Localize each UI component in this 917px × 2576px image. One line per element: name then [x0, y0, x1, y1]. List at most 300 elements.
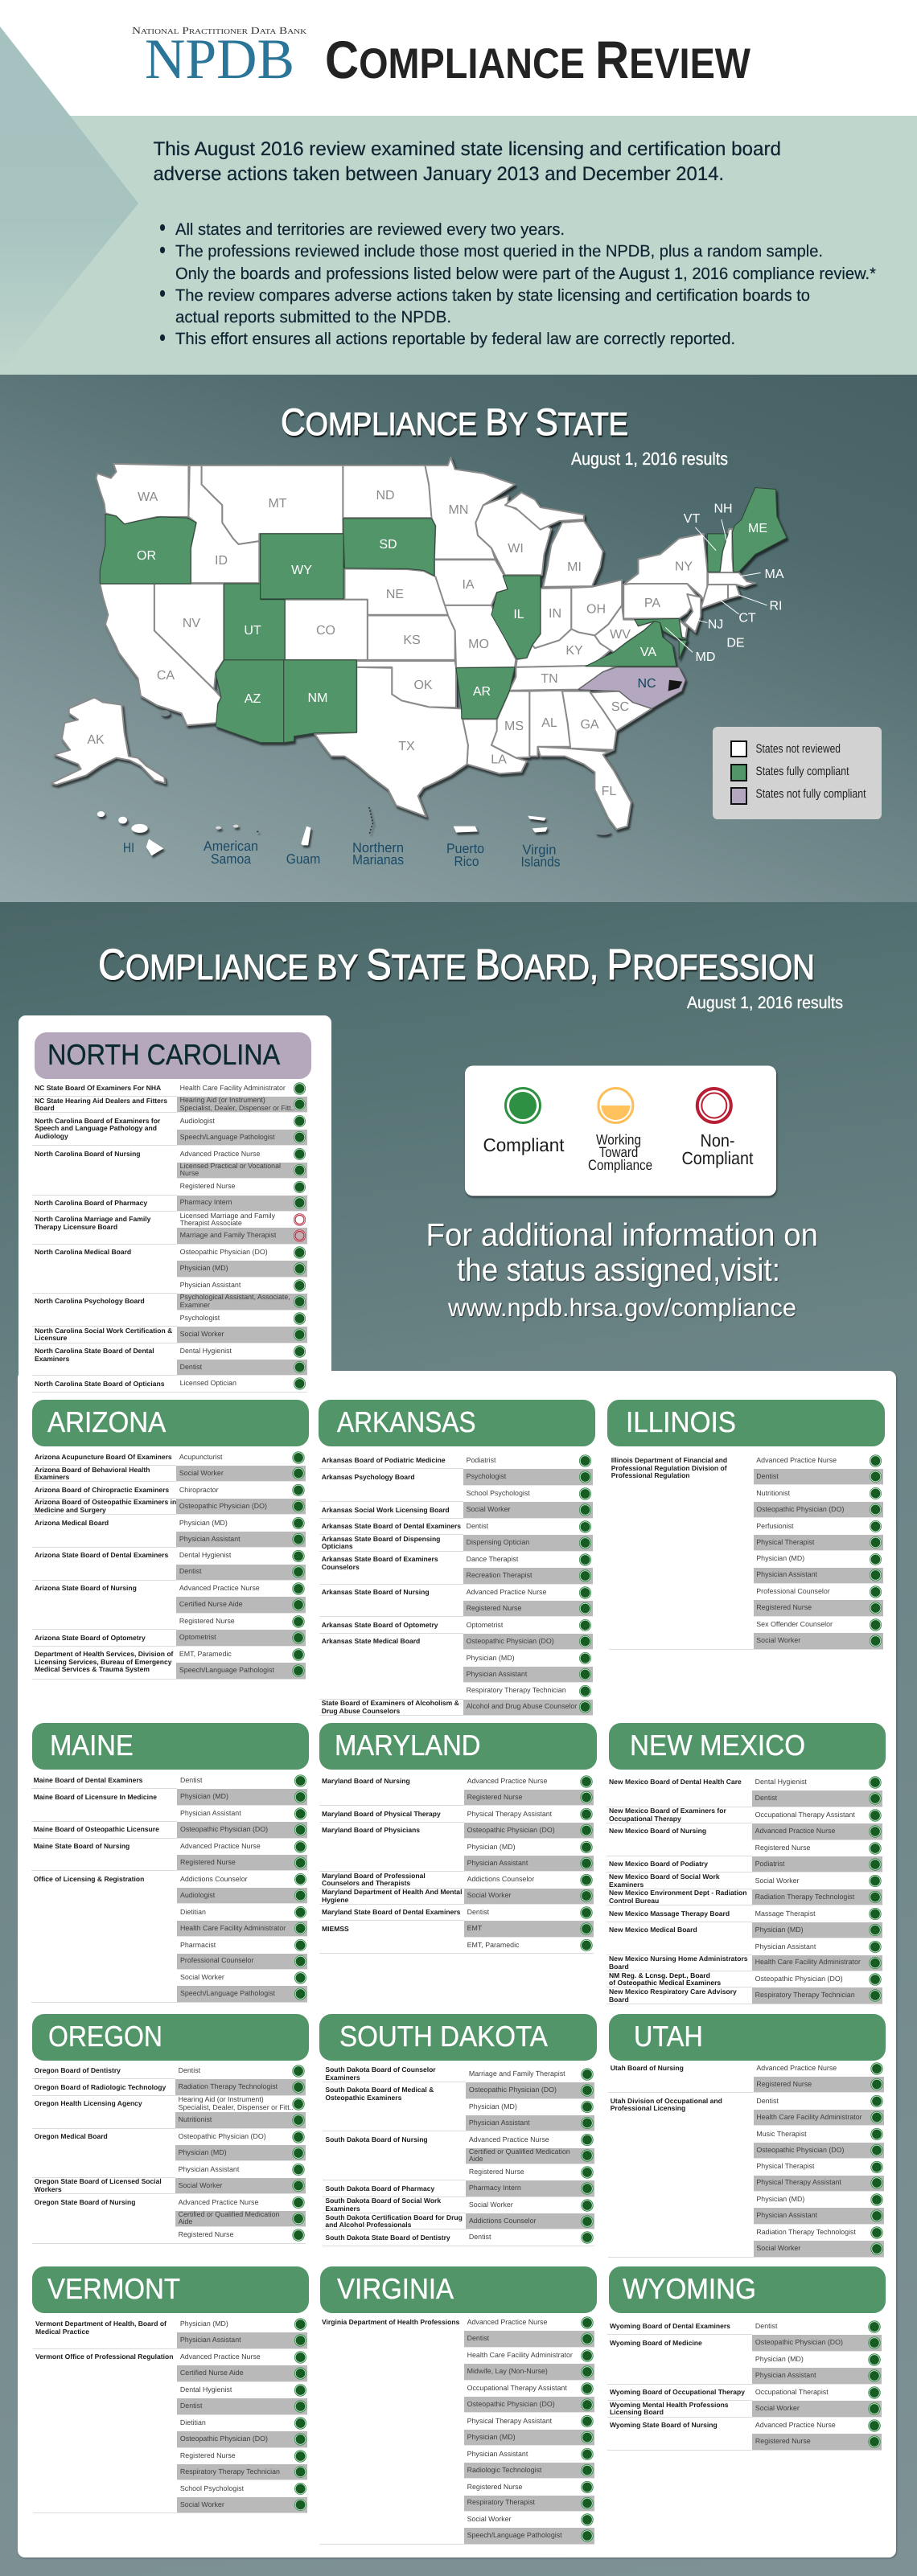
table: Vermont boards: Physician Assistant	[180, 2336, 241, 2344]
table: Illinois boards: Illinois Department of Financial and	[611, 1456, 727, 1464]
map: grey state labels: MT	[268, 497, 287, 511]
table: South Dakota boards: South Dakota Certification Board for Drug	[325, 2213, 463, 2221]
table: North Carolina boards: Audiologist	[180, 1117, 215, 1125]
map: grey state labels: ND	[376, 489, 395, 502]
table: Maine boards: Physician (MD)	[180, 1792, 228, 1800]
table: North Carolina boards: North Carolina Board of Examiners for	[35, 1117, 160, 1125]
table: Arkansas boards: Podiatrist	[467, 1456, 496, 1464]
table: Oregon boards: Social Worker	[179, 2181, 222, 2189]
table: Maryland boards: Maryland Board of Physical Therapy	[322, 1810, 441, 1818]
map legend: States not reviewed	[756, 742, 841, 756]
table: Illinois boards: Physician Assistant	[756, 1570, 817, 1578]
table: New Mexico boards: New Mexico Board of Examiners for	[609, 1807, 726, 1815]
table: Vermont boards: Certified Nurse Aide	[180, 2369, 244, 2377]
map: white state labels: AR	[473, 685, 491, 699]
map: grey state labels: WA	[138, 490, 158, 504]
table: Vermont boards: Registered Nurse	[180, 2451, 236, 2459]
legend labels: Compliance	[588, 1157, 652, 1173]
state: Maine	[31, 1723, 309, 2003]
map: grey state labels: IA	[462, 578, 475, 592]
heading: Arizona	[32, 1400, 309, 1446]
map: white state labels: NM	[308, 691, 327, 705]
table: New Mexico boards: Physician Assistant	[755, 1942, 816, 1950]
state: Vermont	[32, 2266, 309, 2513]
bullet list: The professions reviewed include those most queried in the NPDB, plus a random sample.	[175, 242, 823, 260]
heading: New Mexico: NEW MEXICO	[629, 1729, 805, 1762]
table: Maryland boards: Addictions Counselor	[467, 1875, 534, 1883]
additional information note: the status assigned,visit:	[457, 1253, 780, 1288]
table: South Dakota boards: Osteopathic Examiners	[325, 2094, 401, 2102]
territory labels: Marianas	[352, 852, 404, 868]
table: Vermont boards	[33, 2318, 307, 2513]
table: North Carolina boards: Examiners	[35, 1354, 69, 1362]
table: Oregon boards: Specialist, Dealer, Dispenser or Fitt..	[179, 2103, 294, 2111]
map: white state labels: CT	[738, 611, 756, 626]
map: white state labels: WY	[291, 564, 312, 577]
table: Arizona boards: Advanced Practice Nurse	[179, 1584, 260, 1592]
table: North Carolina boards: Psychologist	[180, 1314, 220, 1322]
table: North Carolina boards: North Carolina Board of Pharmacy	[35, 1199, 147, 1207]
map: white state labels: UT	[244, 624, 261, 638]
table: Virginia boards: Health Care Facility Administrator	[467, 2351, 573, 2359]
map: grey state labels: SC	[611, 700, 629, 714]
table: Wyoming boards: Wyoming Board of Occupational Therapy	[610, 2388, 745, 2396]
table: Oregon boards: Physician (MD)	[179, 2148, 227, 2156]
table: Oregon boards: Certified or Qualified Medication	[179, 2210, 279, 2218]
table: Virginia boards: Physician Assistant	[467, 2450, 528, 2458]
table: North Carolina boards: Specialist, Dealer, Dispenser or Fitt..	[180, 1104, 295, 1112]
table: Illinois boards: Dentist	[756, 1472, 779, 1480]
table: Utah boards: Physician (MD)	[756, 2195, 804, 2203]
table: Maine boards: Physician Assistant	[180, 1809, 241, 1817]
chevron arrow	[0, 27, 138, 374]
table: Arkansas boards: Arkansas State Board of Dispensing	[322, 1535, 440, 1543]
heading: Compliance By State: COMPLIANCE BY STATE	[281, 400, 628, 443]
table: North Carolina boards: Physician Assistant	[180, 1281, 241, 1289]
table: Maryland boards: Maryland Department of Health And Mental	[322, 1888, 462, 1896]
table: Vermont boards: Osteopathic Physician (DO)	[180, 2434, 268, 2443]
map: grey state labels: WV	[610, 628, 631, 642]
icon: non-compliant	[697, 1089, 731, 1122]
bullet list: actual reports submitted to the NPDB.	[175, 308, 451, 326]
table: Maine boards: Dentist	[180, 1776, 203, 1784]
map: grey state labels	[87, 489, 693, 798]
table: Virginia boards: Respiratory Therapist	[467, 2498, 535, 2506]
table: Arkansas boards: Arkansas State Board of Nursing	[322, 1588, 430, 1596]
table: North Carolina boards: Examiner	[180, 1301, 210, 1309]
table: South Dakota boards: Dentist	[469, 2233, 491, 2241]
heading: Maryland	[319, 1723, 597, 1770]
table: North Carolina boards: Nurse	[180, 1169, 199, 1177]
map: grey state labels: OK	[413, 679, 433, 692]
map: white state labels	[137, 502, 784, 706]
table: Virginia boards: Speech/Language Pathologist	[467, 2531, 562, 2539]
table: Maryland boards: Maryland Board of Nursing	[322, 1777, 410, 1785]
heading: South Dakota: SOUTH DAKOTA	[339, 2020, 548, 2053]
heading: South Dakota	[319, 2014, 597, 2061]
table: Illinois boards: Registered Nurse	[756, 1603, 812, 1611]
table: Arkansas boards: Dentist	[467, 1522, 488, 1530]
table: Maine boards: Registered Nurse	[180, 1858, 236, 1866]
table: North Carolina boards: North Carolina State Board of Opticians	[35, 1380, 164, 1388]
table: Virginia boards: Registered Nurse	[467, 2483, 522, 2491]
table: Arkansas boards: Arkansas Psychology Board	[322, 1473, 415, 1481]
map: white state labels: SD	[379, 538, 397, 552]
table: South Dakota boards: South Dakota Board of Medical &	[325, 2086, 434, 2094]
table: Oregon boards: Hearing Aid (or Instrument)	[179, 2095, 264, 2103]
table: Illinois boards: Physician (MD)	[756, 1554, 804, 1562]
table: New Mexico boards: Dental Hygienist	[755, 1778, 807, 1786]
table: North Carolina boards: Speech and Language Pathology and	[35, 1124, 157, 1132]
table: North Carolina boards: Therapist Associate	[180, 1219, 242, 1227]
table: Illinois boards: Physical Therapist	[756, 1538, 814, 1546]
table: Oregon boards: Oregon State Board of Nursing	[35, 2198, 135, 2206]
map: white state labels: IL	[513, 608, 524, 621]
subheading: map date: August 1, 2016 results	[571, 449, 728, 469]
table: North Carolina boards: Therapy Licensure Board	[35, 1223, 117, 1231]
table: Maine boards: Maine Board of Dental Examiners	[34, 1776, 142, 1784]
table: South Dakota boards: Physician (MD)	[469, 2102, 517, 2110]
table: Illinois boards: Social Worker	[756, 1636, 800, 1644]
map: grey state labels: IN	[549, 607, 561, 621]
map: white state labels: MA	[764, 568, 784, 581]
heading: Compliance by State Board, Profession: COMPLIANCE BY STATE BOARD, PROFESSION	[98, 941, 815, 989]
table: North Carolina boards: Osteopathic Physician (DO)	[180, 1248, 268, 1256]
heading: North Carolina: NORTH CAROLINA	[47, 1038, 280, 1071]
table: Utah boards: Registered Nurse	[756, 2080, 812, 2088]
table: North Carolina boards: Psychological Assistant, Associate,	[180, 1293, 290, 1301]
table: Arkansas boards: Drug Abuse Counselors	[322, 1707, 400, 1715]
map: grey state labels: MN	[449, 503, 468, 517]
heading: Maine: MAINE	[50, 1729, 134, 1762]
table: Virginia boards	[319, 2316, 594, 2545]
heading: Arkansas: ARKANSAS	[337, 1405, 476, 1438]
table: Arizona boards: Optometrist	[179, 1633, 216, 1641]
territory labels: Northern	[352, 840, 404, 855]
table: South Dakota boards: South Dakota State Board of Dentistry	[325, 2233, 450, 2242]
table: Arkansas boards: Physician Assistant	[467, 1670, 527, 1678]
table: Arizona boards: Medicine and Surgery	[35, 1506, 106, 1514]
table: Arizona boards: Licensing Services, Bureau of Emergency	[35, 1658, 172, 1666]
additional information note: For additional information on	[426, 1218, 818, 1253]
table: New Mexico boards: Occupational Therapy	[609, 1815, 681, 1823]
table: Utah boards: Music Therapist	[756, 2130, 807, 2138]
table: Wyoming boards: Wyoming State Board of Nursing	[610, 2421, 718, 2429]
table: North Carolina boards: Licensed Practical or Vocational	[180, 1162, 281, 1170]
table: Maryland boards: Advanced Practice Nurse	[467, 1777, 547, 1785]
heading: Arizona: ARIZONA	[47, 1405, 166, 1438]
legend labels: Working	[596, 1132, 641, 1148]
table: Arkansas boards: Respiratory Therapy Technician	[467, 1686, 566, 1694]
table: Arizona boards: Arizona Board of Osteopathic Examiners in	[35, 1498, 176, 1506]
heading: Utah: UTAH	[634, 2020, 703, 2053]
table: South Dakota boards: Aide	[469, 2155, 483, 2163]
table: Maryland boards: Maryland Board of Physicians	[322, 1826, 420, 1834]
table: New Mexico boards: Control Bureau	[609, 1897, 659, 1905]
map: grey state labels: NV	[183, 617, 200, 630]
heading: Oregon	[32, 2014, 309, 2061]
map: grey state labels: MI	[567, 560, 582, 574]
panel: North Carolina	[19, 1015, 331, 1401]
table: Maine boards: Health Care Facility Administrator	[180, 1924, 286, 1932]
map: grey state labels: CA	[157, 669, 175, 683]
state: Utah	[608, 2014, 886, 2258]
table: Illinois boards: Sex Offender Counselor	[756, 1620, 833, 1628]
table: Wyoming boards: Wyoming Mental Health Professions	[610, 2401, 729, 2409]
table: Maryland boards: EMT, Paramedic	[467, 1941, 519, 1949]
table: Maryland boards: Physician Assistant	[467, 1859, 528, 1867]
legend labels	[483, 1130, 753, 1173]
additional information note: www.npdb.hrsa.gov/compliance	[447, 1294, 796, 1322]
table: South Dakota boards: South Dakota Board of Counselor	[325, 2065, 436, 2074]
heading: North Carolina	[35, 1032, 311, 1079]
map: white state labels: RI	[769, 600, 782, 613]
table: Virginia boards: Occupational Therapy Assistant	[467, 2384, 567, 2392]
table: North Carolina boards: Hearing Aid (or Instrument)	[180, 1096, 265, 1104]
map legend: States fully compliant	[756, 765, 849, 778]
logo: NPDB: NPDB	[145, 28, 294, 91]
table: Arkansas boards: Osteopathic Physician (DO)	[467, 1637, 554, 1645]
state: Maryland	[319, 1723, 597, 1954]
table: North Carolina boards: Advanced Practice Nurse	[180, 1150, 260, 1158]
table: Oregon boards: Osteopathic Physician (DO)	[179, 2132, 266, 2140]
legend labels: Non-	[700, 1130, 735, 1151]
table: Illinois boards: Advanced Practice Nurse	[756, 1456, 837, 1464]
map: white state labels: ME	[748, 522, 767, 535]
table: Arizona boards: Arizona Acupuncture Board Of Examiners	[35, 1453, 172, 1461]
map: North Carolina label: NC	[637, 677, 656, 691]
table: Oregon boards: Registered Nurse	[179, 2230, 233, 2238]
table: Illinois boards: Professional Regulation Division of	[611, 1463, 727, 1471]
heading: Wyoming	[609, 2266, 886, 2313]
territory labels: American	[204, 839, 258, 854]
map: grey state labels: LA	[491, 753, 507, 767]
table: Maryland boards: Physician (MD)	[467, 1843, 516, 1851]
table: Utah boards	[608, 2062, 884, 2258]
table: Maryland boards: Dentist	[467, 1908, 489, 1916]
background: compliance by state section	[0, 375, 917, 902]
table: New Mexico boards: Osteopathic Physician (DO)	[755, 1975, 843, 1983]
map: grey state labels: NE	[386, 588, 404, 601]
table: Maryland boards: MIEMSS	[322, 1925, 349, 1933]
table: Virginia boards: Social Worker	[467, 2515, 511, 2523]
table: Arizona boards: Arizona State Board of Nursing	[35, 1584, 137, 1592]
table: Arkansas boards: Social Worker	[467, 1505, 510, 1513]
table: Oregon boards: Oregon State Board of Licensed Social	[35, 2177, 162, 2185]
table: Arizona boards: Acupuncturist	[179, 1453, 222, 1461]
table: New Mexico boards: New Mexico Board of Nursing	[609, 1827, 706, 1835]
table: New Mexico boards: Occupational Therapy Assistant	[755, 1811, 855, 1819]
territory labels: Samoa	[211, 851, 251, 867]
table: Arizona boards: Osteopathic Physician (DO)	[179, 1502, 267, 1510]
table: Utah boards: Social Worker	[756, 2244, 800, 2252]
table: Virginia boards: Dentist	[467, 2334, 489, 2342]
map: white state labels: DE	[726, 637, 745, 650]
table: Virginia boards: Osteopathic Physician (DO)	[467, 2400, 555, 2408]
table: Vermont boards: School Psychologist	[180, 2484, 244, 2492]
table: Arkansas boards: Arkansas State Board of Examiners	[322, 1555, 438, 1563]
table: North Carolina boards: Registered Nurse	[180, 1182, 235, 1190]
bullet list: Only the boards and professions listed below were part of the August 1, 2016 compliance review.*	[175, 265, 876, 283]
table: Arkansas boards: Optometrist	[467, 1621, 503, 1629]
table: Oregon boards: Radiation Therapy Technologist	[179, 2082, 278, 2090]
table: Vermont boards: Dietitian	[180, 2418, 206, 2426]
table: Maryland boards: Social Worker	[467, 1891, 511, 1899]
table: Maine boards: Maine Board of Osteopathic Licensure	[34, 1825, 159, 1833]
table: North Carolina boards: Dentist	[180, 1363, 202, 1371]
table: Arizona boards: Chiropractor	[179, 1486, 219, 1494]
territory labels	[123, 839, 560, 870]
territory labels: Islands	[521, 854, 560, 870]
legend labels: Compliant	[483, 1134, 565, 1155]
heading: Virginia: VIRGINIA	[337, 2272, 454, 2305]
map: grey state labels: MS	[504, 720, 524, 733]
table: Vermont boards: Respiratory Therapy Technician	[180, 2467, 280, 2476]
map: grey state labels: AK	[87, 733, 105, 747]
table: New Mexico boards: Advanced Practice Nurse	[755, 1827, 835, 1835]
table: New Mexico boards: Physician (MD)	[755, 1926, 804, 1934]
territory labels: Guam	[286, 851, 320, 867]
table: Arkansas boards: Arkansas State Board of Optometry	[322, 1621, 438, 1629]
table: Utah boards: Advanced Practice Nurse	[756, 2064, 837, 2072]
heading: Vermont: VERMONT	[47, 2272, 180, 2305]
table: Wyoming boards: Registered Nurse	[755, 2437, 811, 2445]
icon: working toward compliance	[598, 1089, 633, 1122]
header, map and legend artwork	[0, 25, 882, 1323]
table: Vermont boards: Dentist	[180, 2402, 202, 2410]
table: New Mexico boards: Radiation Therapy Technologist	[755, 1893, 854, 1901]
bullet list	[160, 220, 876, 348]
table: Maine boards: Professional Counselor	[180, 1956, 253, 1964]
table: Virginia boards: Virginia Department of Health Professions	[322, 2318, 459, 2326]
table: Wyoming boards	[607, 2320, 882, 2451]
table: Arizona boards: Arizona State Board of Optometry	[35, 1634, 146, 1642]
table: Utah boards: Utah Division of Occupational and	[611, 2097, 722, 2105]
heading: Wyoming: WYOMING	[623, 2272, 756, 2305]
status legend card	[465, 1066, 776, 1196]
table: Virginia boards: Midwife, Lay (Non-Nurse)	[467, 2367, 548, 2375]
bullet list: All states and territories are reviewed every two years.	[175, 220, 565, 239]
table: Illinois boards: Professional Regulation	[611, 1471, 690, 1479]
table: Oregon boards: Aide	[179, 2217, 192, 2225]
table: Wyoming boards: Occupational Therapist	[755, 2388, 829, 2396]
table: Maryland boards: Hygiene	[322, 1896, 348, 1904]
table: North Carolina boards: Social Worker	[180, 1330, 224, 1338]
heading: Utah	[609, 2014, 886, 2061]
table: Arkansas boards: Arkansas Social Work Licensing Board	[322, 1506, 450, 1514]
table: Arizona boards: Registered Nurse	[179, 1617, 235, 1625]
table: Arkansas boards: Arkansas Board of Podiatric Medicine	[322, 1456, 446, 1464]
intro paragraph: adverse actions taken between January 2013 and December 2014.	[153, 163, 724, 185]
table: Utah boards: Radiation Therapy Technologist	[756, 2228, 856, 2236]
map: grey state labels: GA	[580, 718, 599, 732]
table: North Carolina boards: North Carolina Social Work Certification &	[35, 1327, 172, 1335]
table: Arizona boards: Speech/Language Pathologist	[179, 1666, 274, 1674]
table: Utah boards: Physician Assistant	[756, 2211, 817, 2219]
map: white state labels: MD	[696, 650, 715, 664]
table: Arkansas boards: Registered Nurse	[467, 1604, 521, 1612]
table: South Dakota boards: South Dakota Board of Social Work	[325, 2197, 441, 2205]
heading: Maryland: MARYLAND	[335, 1729, 480, 1762]
table: Maine boards: Addictions Counselor	[180, 1875, 248, 1883]
table: Maine boards: Pharmacist	[180, 1941, 216, 1949]
map: grey state labels: NY	[675, 560, 693, 574]
table: Oregon boards: Oregon Board of Radiologic Technology	[35, 2083, 166, 2091]
map: grey state labels: TN	[541, 672, 558, 686]
table: New Mexico boards: Board	[609, 1996, 629, 2004]
table: Oregon boards: Dentist	[179, 2066, 200, 2074]
table: Arkansas boards: Recreation Therapist	[467, 1571, 533, 1579]
map: grey state labels: FL	[602, 785, 616, 798]
table: Utah boards: Dentist	[756, 2097, 779, 2105]
heading: Illinois: ILLINOIS	[626, 1405, 736, 1438]
map: grey state labels: ID	[215, 554, 228, 568]
table: Utah boards: Professional Licensing	[611, 2104, 685, 2112]
table: Vermont boards: Medical Practice	[35, 2328, 89, 2336]
heading: Vermont	[32, 2266, 309, 2313]
table: South Dakota boards: Addictions Counselor	[469, 2217, 536, 2225]
intro paragraph: This August 2016 review examined state licensing and certification board	[153, 138, 781, 160]
table: Arizona boards: Medical Services & Trauma System	[35, 1665, 150, 1673]
table: Vermont boards: Vermont Department of Health, Board of	[35, 2320, 167, 2328]
map: grey state labels: OH	[586, 603, 606, 616]
table: North Carolina boards: North Carolina State Board of Dental	[35, 1347, 154, 1355]
map: United States by compliance status	[51, 457, 787, 855]
table: Oregon boards	[32, 2065, 306, 2244]
table: Arkansas boards: Dispensing Optician	[467, 1538, 529, 1546]
bullet list: The review compares adverse actions taken by state licensing and certification boards to	[175, 286, 810, 305]
table: North Carolina boards	[32, 1082, 307, 1393]
table: Vermont boards: Advanced Practice Nurse	[180, 2352, 261, 2361]
table: North Carolina boards: Health Care Facility Administrator	[180, 1084, 286, 1092]
table: Arizona boards: Dentist	[179, 1567, 201, 1575]
map: white state labels: VT	[684, 512, 700, 526]
table: Wyoming boards: Physician Assistant	[755, 2371, 816, 2379]
table: South Dakota boards: South Dakota Board of Pharmacy	[325, 2184, 434, 2192]
heading: Virginia	[320, 2266, 597, 2313]
table: Wyoming boards: Wyoming Board of Dental Examiners	[610, 2322, 730, 2330]
table: Virginia boards: Physical Therapy Assistant	[467, 2417, 552, 2425]
table: South Dakota boards: Osteopathic Physician (DO)	[469, 2086, 557, 2094]
table: Virginia boards: Radiologic Technologist	[467, 2466, 541, 2474]
table: New Mexico boards: NM Reg. & Lcnsg. Dept., Board	[609, 1971, 710, 1979]
state: South Dakota	[319, 2014, 597, 2246]
table: Maryland boards: Physical Therapy Assistant	[467, 1810, 552, 1818]
table: Maine boards: Audiologist	[180, 1891, 215, 1899]
heading: Maine	[32, 1723, 309, 1770]
table: Illinois boards: Professional Counselor	[756, 1587, 830, 1595]
state: New Mexico	[607, 1723, 886, 2004]
heading: New Mexico	[609, 1723, 886, 1770]
territory labels: Rico	[454, 854, 479, 869]
table: Maine boards	[31, 1774, 307, 2003]
table: South Dakota boards: Certified or Qualified Medication	[469, 2147, 570, 2156]
table: Illinois boards: Perfusionist	[756, 1522, 793, 1530]
table: New Mexico boards: Examiners	[609, 1881, 644, 1889]
table: New Mexico boards: Board	[609, 1963, 629, 1971]
background: compliance by board section	[0, 902, 917, 2576]
table: South Dakota boards: and Alcohol Professionals	[325, 2221, 411, 2229]
map legend: States not fully compliant	[756, 787, 866, 801]
table: Virginia boards: Advanced Practice Nurse	[467, 2318, 547, 2326]
table: New Mexico boards: New Mexico Environment Dept - Radiation	[609, 1889, 746, 1897]
table: Maine boards: Office of Licensing & Registration	[34, 1875, 144, 1883]
table: Maine boards: Osteopathic Physician (DO)	[180, 1825, 268, 1833]
table: Maryland boards	[319, 1775, 594, 1954]
table: South Dakota boards: Social Worker	[469, 2201, 513, 2209]
table: Arkansas boards	[319, 1454, 593, 1716]
table: North Carolina boards: Licensed Marriage and Family	[180, 1212, 275, 1220]
